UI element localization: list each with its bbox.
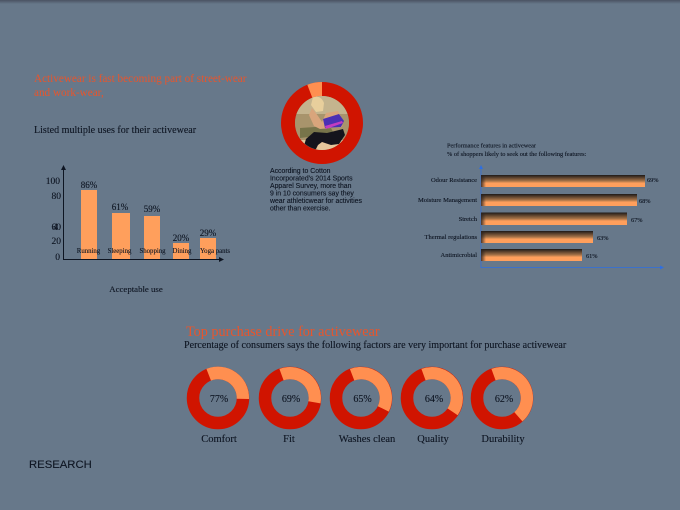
callout: Cotton Incorporated survey: wear athleticwear for activities [269, 198, 362, 205]
donut: comfort: 77% [210, 394, 228, 405]
y axis labels: 80 [52, 192, 61, 202]
value labels: 61% [586, 253, 598, 260]
photo: seated athlete [295, 96, 349, 153]
performance features heading: % of shoppers likely to seek out the following features: [447, 151, 587, 158]
heading: activewear street-wear: Activewear is fast becoming part of street-wear [34, 73, 246, 85]
donut: washes clean [336, 367, 396, 445]
y axis labels: 100 [46, 177, 60, 187]
donut: durability: 62% [495, 394, 513, 405]
y axis labels: 60 [52, 223, 61, 233]
value labels: 29% [200, 228, 217, 238]
value labels: 86% [81, 180, 98, 190]
category labels: Running [77, 248, 101, 255]
heading: activewear street-wear: and work-wear, [34, 87, 104, 99]
horizontal bar chart: performance features [418, 165, 664, 270]
category labels: Yoga pants [200, 248, 230, 255]
value labels: 63% [597, 235, 609, 242]
callout: Cotton Incorporated survey: According to Cotton [270, 168, 331, 175]
bar left shading [481, 175, 486, 261]
callout: Cotton Incorporated survey: Apparel Survey, more than [270, 183, 352, 190]
donut: quality: 64% [425, 394, 443, 405]
value labels: 67% [631, 217, 643, 224]
value labels: 68% [639, 198, 651, 205]
category labels: Antimicrobial [441, 252, 477, 259]
performance features heading: Performance features in activewear [447, 142, 536, 150]
category labels: Stretch [459, 216, 478, 223]
callout: Cotton Incorporated survey: other than exercise. [270, 206, 331, 212]
bars [81, 190, 216, 259]
category labels: Thermal regulations [424, 234, 477, 241]
callout: Cotton Incorporated survey: 9 in 10 consumers say they [270, 190, 354, 198]
value labels [81, 180, 217, 243]
donut: quality [407, 367, 463, 445]
callout: Cotton Incorporated survey: Incorporated's 2014 Sports [270, 176, 353, 182]
axes [61, 165, 224, 262]
donut: comfort: Comfort [201, 434, 237, 445]
axes [479, 165, 664, 270]
y axis labels: 4 [53, 223, 58, 233]
category labels [77, 248, 230, 255]
donut: quality: Quality [417, 434, 449, 445]
donut: fit: Fit [283, 434, 295, 445]
donut: washes clean: 65% [353, 394, 372, 405]
value labels [586, 177, 659, 260]
footer label: research: RESEARCH [29, 459, 92, 471]
axis title: Acceptable use [109, 284, 163, 294]
subheading: multiple uses: Listed multiple uses for their activewear [34, 125, 197, 136]
donut: comfort [193, 367, 249, 445]
y axis labels: 20 [52, 237, 61, 247]
category labels [418, 177, 478, 259]
value labels: 69% [647, 177, 659, 184]
donut: durability: Durability [481, 434, 525, 445]
value labels: 59% [144, 204, 161, 214]
bar chart: acceptable use [46, 165, 230, 294]
category labels: Dining [173, 248, 192, 255]
heading: top purchase drive: Top purchase drive for activewear [186, 324, 380, 340]
donut: durability [477, 367, 533, 445]
value labels: 20% [173, 233, 190, 243]
subheading: percentage of consumers: Percentage of consumers says the following factors are very important for purchase activewear [184, 340, 567, 351]
donut ring [288, 89, 356, 157]
category labels: Shopping [139, 248, 166, 255]
donut: washes clean: Washes clean [339, 434, 396, 445]
value labels: 61% [112, 202, 129, 212]
donut: fit: 69% [282, 394, 300, 405]
y axis labels [46, 177, 61, 263]
category labels: Odour Resistance [431, 177, 477, 184]
donut: fit [265, 367, 321, 445]
category labels: Moisture Management [418, 197, 477, 204]
y axis labels: 0 [55, 253, 60, 263]
category labels: Sleeping [108, 248, 132, 255]
bars [481, 175, 645, 261]
donut with photo [288, 82, 356, 157]
